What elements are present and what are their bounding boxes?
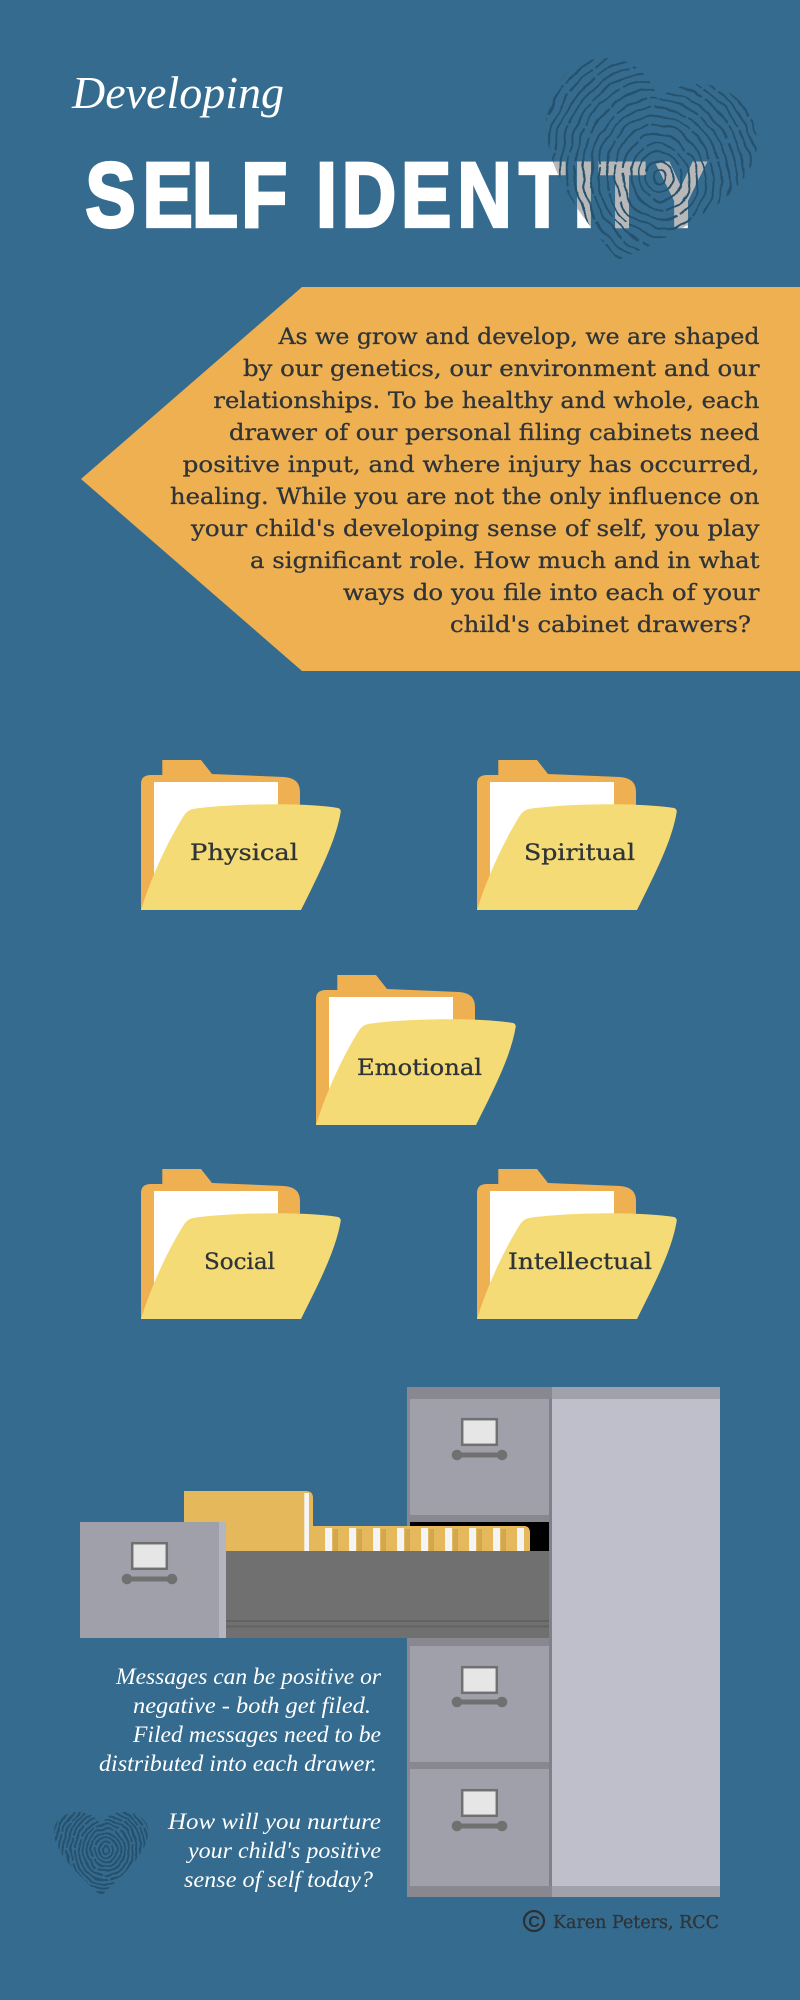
intro text: relationships. To be healthy and whole, each bbox=[213, 388, 759, 414]
folder: Spiritual: Spiritual bbox=[524, 840, 635, 866]
icon: fingerprint heart small bbox=[54, 1812, 148, 1894]
intro text: positive input, and where injury has occurred, bbox=[183, 452, 759, 478]
intro text: child's cabinet drawers? bbox=[450, 612, 751, 638]
subtitle: Developing: Developing bbox=[71, 67, 284, 118]
folder: Spiritual bbox=[477, 760, 677, 910]
text: messages note: negative - both get filed. bbox=[133, 1693, 371, 1718]
folder: Physical bbox=[141, 760, 341, 910]
tall folder bbox=[184, 1491, 313, 1551]
filing cabinet bbox=[80, 1387, 720, 1897]
text: nurture question: your child's positive bbox=[186, 1838, 381, 1863]
folder: Emotional bbox=[316, 975, 516, 1125]
title: Self Identity bbox=[85, 143, 706, 246]
intro text: your child's developing sense of self, you play bbox=[190, 516, 760, 542]
folder: Intellectual: Intellectual bbox=[508, 1249, 652, 1275]
text: nurture question: sense of self today? bbox=[184, 1867, 374, 1892]
copyright credit: Karen Peters, RCC bbox=[553, 1913, 719, 1933]
intro text: by our genetics, our environment and our bbox=[243, 356, 760, 382]
intro text bbox=[170, 324, 760, 638]
folder: Social bbox=[141, 1169, 341, 1319]
open drawer side bbox=[226, 1551, 549, 1638]
intro text: drawer of our personal filing cabinets need bbox=[229, 420, 760, 446]
cabinet side panel bbox=[552, 1387, 720, 1897]
intro text: healing. While you are not the only influence on bbox=[170, 484, 760, 510]
drawer 4 bbox=[410, 1769, 549, 1886]
text: messages note: Messages can be positive or bbox=[115, 1664, 382, 1689]
folder: Intellectual bbox=[477, 1169, 677, 1319]
text: nurture question: How will you nurture bbox=[167, 1809, 381, 1834]
panel: intro arrow bbox=[81, 287, 800, 671]
open drawer front bbox=[80, 1522, 226, 1638]
icon: fingerprint heart large bbox=[546, 58, 756, 259]
text: nurture question bbox=[167, 1809, 381, 1892]
drawer 1 bbox=[410, 1399, 549, 1515]
title: Self Identity: IDENTITY bbox=[316, 143, 706, 246]
intro text: ways do you file into each of your bbox=[343, 580, 760, 606]
copyright credit: C bbox=[528, 1914, 540, 1931]
text: messages note: distributed into each drawer. bbox=[99, 1751, 377, 1776]
text: messages note: Filed messages need to be bbox=[132, 1722, 381, 1747]
drawer 3 bbox=[410, 1646, 549, 1762]
title: Self Identity: SELF bbox=[85, 143, 287, 246]
folders in drawer bbox=[184, 1491, 530, 1551]
intro text: As we grow and develop, we are shaped bbox=[277, 324, 760, 350]
text: messages note bbox=[99, 1664, 382, 1776]
intro text: a significant role. How much and in what bbox=[250, 548, 760, 574]
open drawer cavity bbox=[410, 1522, 549, 1552]
folder: Emotional: Emotional bbox=[357, 1055, 482, 1081]
folder: Physical: Physical bbox=[190, 840, 298, 866]
folder: Social: Social bbox=[204, 1249, 275, 1275]
cabinet frame bbox=[407, 1387, 552, 1897]
